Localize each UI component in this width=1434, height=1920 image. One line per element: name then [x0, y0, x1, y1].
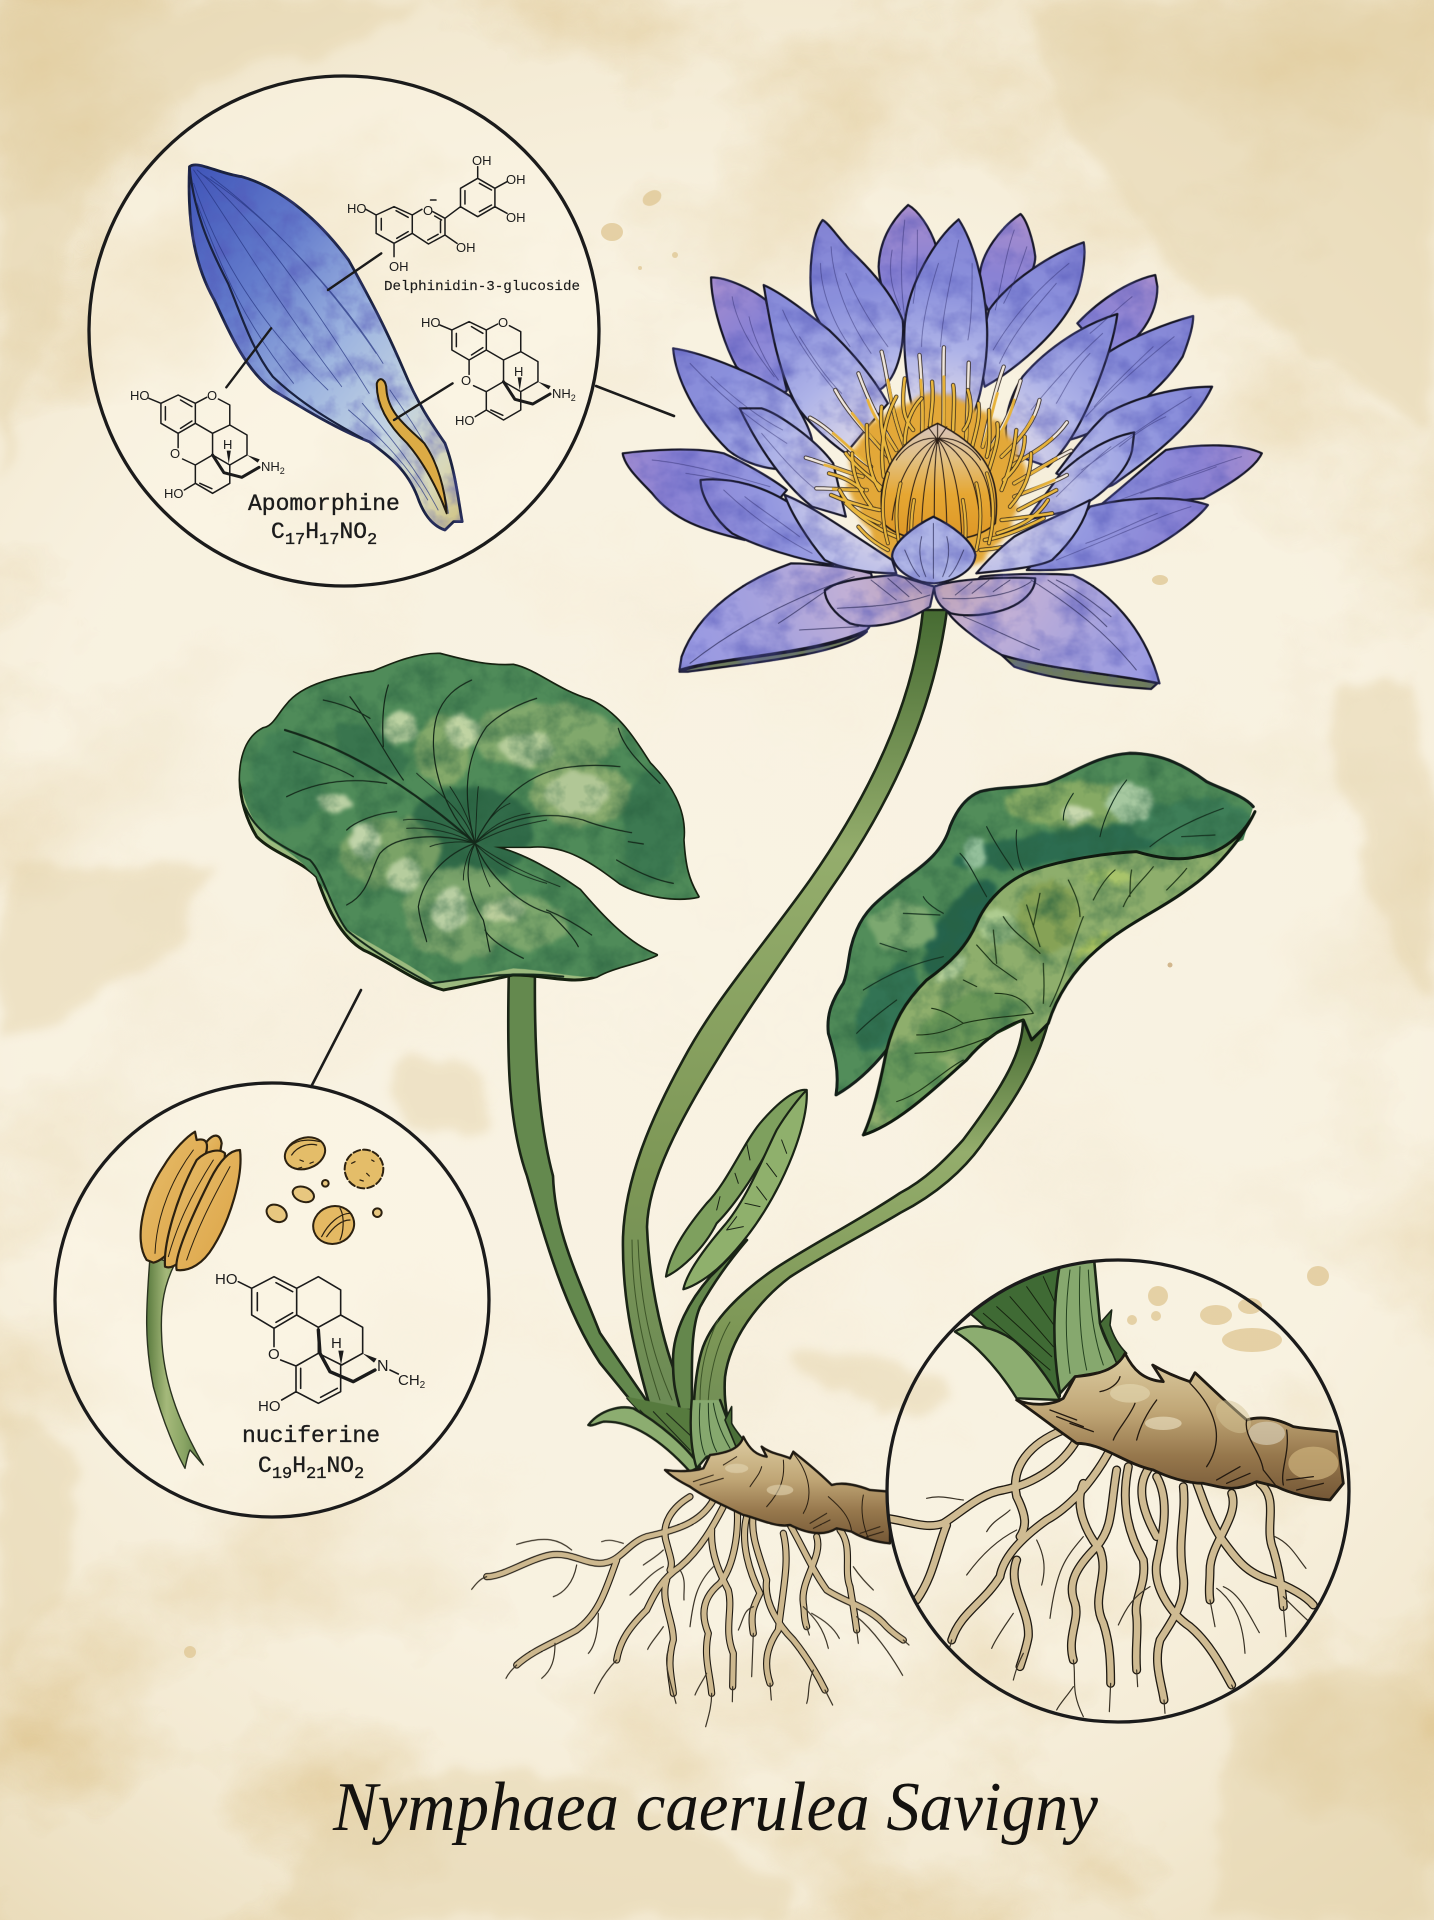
atom labels: 2 — [571, 393, 576, 403]
roots outline — [887, 1430, 1313, 1700]
stalk sheath — [1054, 1258, 1122, 1393]
petal fold — [189, 167, 362, 438]
pistil lines — [892, 423, 991, 537]
label: nuciferine formula: C — [258, 1453, 272, 1479]
central pistil bud — [881, 423, 997, 541]
panel: petal detail circle — [89, 76, 599, 586]
petal veins — [194, 170, 448, 513]
lily flower — [623, 205, 1262, 689]
label: apomorphine formula: 17 — [319, 531, 339, 550]
fine rootlets — [927, 1497, 1307, 1717]
basal leaf — [588, 1407, 700, 1472]
label: nuciferine formula: 19 — [272, 1465, 292, 1484]
label: nuciferine formula: 21 — [306, 1465, 326, 1484]
roots dark outline — [487, 1497, 903, 1693]
leaf top surface wash — [240, 654, 698, 983]
back leaf lobe — [829, 754, 1253, 1092]
atom labels: HO — [164, 486, 184, 501]
front petal details — [690, 523, 1136, 670]
lower left sepal underside — [679, 632, 867, 672]
atom labels: HO — [258, 1398, 280, 1415]
stamen filament — [147, 1257, 203, 1468]
lower right sepal underside — [1002, 655, 1157, 689]
atom labels: OH — [506, 210, 526, 225]
leaf sheath around stalk — [692, 1400, 735, 1466]
front stamens outline — [883, 473, 993, 553]
atom labels: O — [207, 388, 217, 403]
label: nuciferine formula: NO — [326, 1453, 354, 1479]
front leaf lobe — [866, 839, 1237, 1132]
atom labels: HO — [347, 201, 366, 216]
bud — [666, 1090, 807, 1289]
rooted base of plant (main view, clipped at detail circle) — [472, 1397, 909, 1727]
molecule: nuciferine structure — [238, 1277, 398, 1403]
label: apomorphine formula: 2 — [367, 531, 377, 550]
molecule: apomorphine structure left — [149, 395, 260, 493]
rhizome highlights — [1110, 1384, 1150, 1403]
atom labels: HO — [215, 1271, 238, 1288]
roots fill — [887, 1430, 1313, 1700]
label: Apomorphine: Apomorphine — [248, 491, 400, 517]
atom labels: N — [377, 1358, 389, 1375]
front leaf outline — [863, 812, 1255, 1135]
rhizome shading lines — [693, 1453, 883, 1538]
basal leaf — [955, 1326, 1060, 1400]
atom labels — [215, 1271, 426, 1415]
atom labels: O — [461, 373, 471, 388]
back leaf outline — [828, 753, 1253, 1095]
atom labels: OH — [456, 240, 476, 255]
petal veins — [652, 220, 1242, 560]
rhizome body — [665, 1437, 890, 1543]
atom labels: CH — [398, 1372, 420, 1389]
rhizome — [1017, 1353, 1343, 1500]
front leaf veins — [897, 867, 1187, 1102]
front petals — [679, 495, 1159, 689]
label: apomorphine formula: C — [271, 519, 285, 545]
atom labels: HO — [421, 315, 440, 330]
atom labels: 2 — [420, 1380, 426, 1391]
lower right sepal — [947, 574, 1159, 683]
atom labels: O — [268, 1346, 280, 1363]
label: apomorphine formula: 17 — [285, 531, 305, 550]
leader lines inside petal panel — [226, 253, 453, 420]
label: Delphinidin-3-glucoside: Delphinidin-3-glucoside — [384, 279, 580, 295]
leaf outline and veins — [243, 680, 673, 983]
outer stamens pale tips — [806, 347, 1071, 497]
front right small petal — [934, 578, 1035, 615]
left lily pad leaf — [240, 654, 698, 990]
circle frame — [55, 1083, 489, 1517]
stem: bud stalk — [673, 1240, 747, 1410]
leaf underside rim — [240, 654, 698, 990]
stamen mass — [806, 347, 1071, 563]
label: apomorphine formula: NO — [339, 519, 367, 545]
atom labels: OH — [506, 172, 526, 187]
stem streaks — [632, 1240, 730, 1410]
outer stamens yellow bodies — [825, 377, 1056, 497]
atom labels: O — [423, 203, 433, 218]
stem: right leaf stalk — [693, 1020, 1048, 1460]
label: nuciferine formula: 2 — [354, 1465, 364, 1484]
leader line: leaf to stamen detail — [311, 990, 361, 1087]
inner stamens outline — [829, 378, 1056, 550]
molecule: apomorphine structure right — [440, 322, 551, 420]
atom labels: H — [331, 1335, 342, 1352]
atom labels: HO — [130, 388, 150, 403]
outer stamens dark outline — [806, 347, 1071, 497]
stripe-dark sheath — [970, 1263, 1063, 1397]
right curled leaf — [826, 752, 1256, 1136]
front centre petal — [892, 517, 975, 583]
petal illustration — [189, 165, 462, 530]
molecule: delphinidin structure — [366, 167, 507, 257]
atom labels: H — [514, 364, 523, 379]
label: nuciferine: nuciferine — [242, 1423, 380, 1449]
atom labels: OH — [472, 153, 492, 168]
circle frame — [887, 1260, 1349, 1722]
atom labels: 2 — [280, 466, 285, 476]
basal sheath stripes — [627, 1397, 693, 1470]
anther — [141, 1132, 241, 1270]
back petals — [623, 205, 1262, 570]
pollen grains — [263, 1132, 383, 1250]
front left small petal — [825, 575, 934, 626]
panel: stamen and pollen detail circle — [55, 1083, 489, 1517]
fine rootlets — [472, 1539, 909, 1727]
stem: left leaf stalk — [508, 965, 655, 1413]
leader line: flower to petal detail — [596, 386, 674, 416]
nectar stripe — [377, 379, 447, 513]
title: Nymphaea caerulea Savigny — [332, 1769, 1099, 1846]
inner stamens yellow — [829, 378, 1056, 550]
atom labels: HO — [455, 413, 474, 428]
atom labels — [130, 153, 576, 501]
lower left sepal — [679, 563, 875, 670]
plant stems — [508, 610, 1048, 1460]
atom labels: NH — [261, 459, 280, 474]
front stamens yellow — [883, 473, 993, 553]
stamen base wash — [850, 393, 1027, 563]
back leaf veins — [857, 780, 1223, 1033]
atom labels: NH — [552, 386, 571, 401]
atom labels: OH — [389, 259, 408, 274]
stem: main flower stalk — [623, 610, 947, 1417]
roots tan fill — [487, 1497, 903, 1693]
label: apomorphine formula: H — [305, 519, 319, 545]
atom labels: O — [498, 315, 508, 330]
panel: rhizome and root detail circle — [887, 1258, 1349, 1722]
decorative stain spots — [184, 187, 1329, 1658]
circle frame — [89, 76, 599, 586]
atom labels: O — [170, 446, 180, 461]
label: nuciferine formula: H — [292, 1453, 306, 1479]
atom labels: H — [223, 437, 232, 452]
